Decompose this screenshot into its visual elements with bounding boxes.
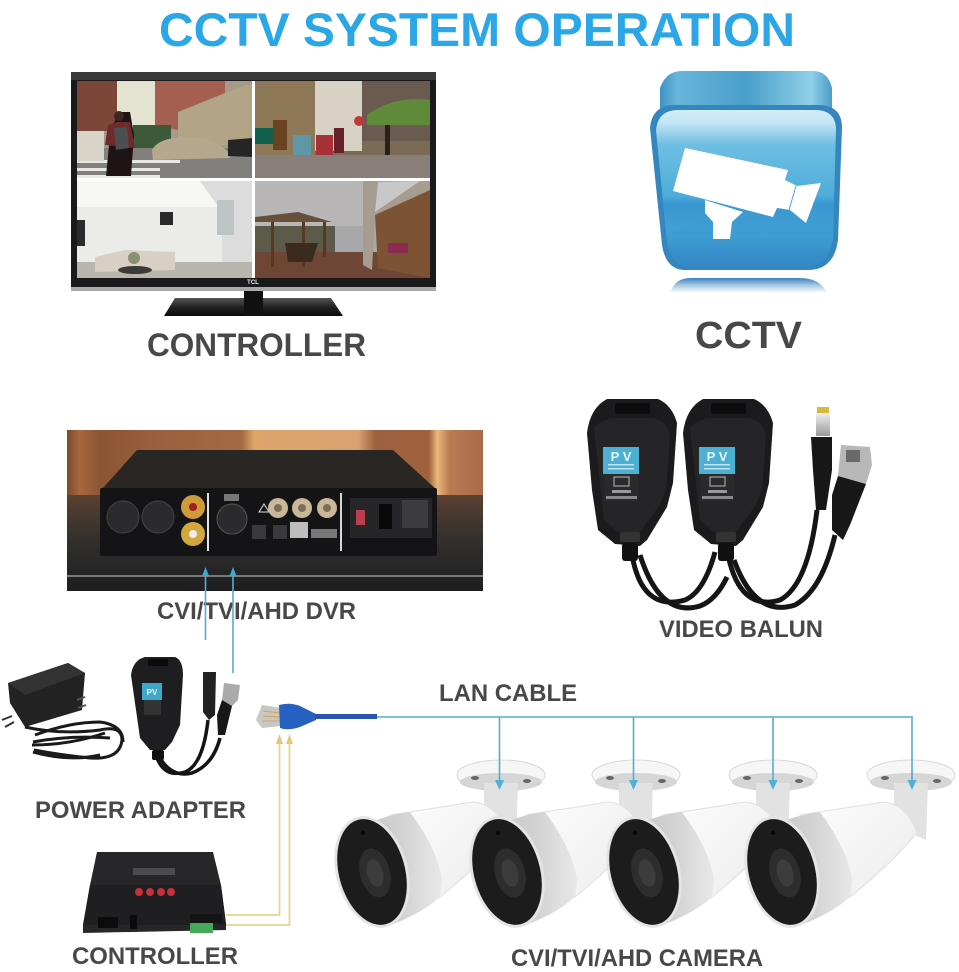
balun left <box>587 399 677 561</box>
camera 2 <box>457 760 680 936</box>
panel: video balun pair <box>587 399 872 608</box>
panel: TV monitor controller <box>71 72 436 316</box>
label: CCTV: CCTV <box>695 315 803 357</box>
icon: single video balun <box>131 657 240 774</box>
arrow: balun to DVR right <box>230 567 236 673</box>
pigtail cables <box>632 510 835 608</box>
icon: power adapter <box>2 663 123 758</box>
camera view: patio <box>255 181 430 278</box>
label: video balun: VIDEO BALUN <box>659 616 823 643</box>
title: CCTV SYSTEM OPERATION <box>159 3 795 56</box>
TV stand <box>164 290 343 316</box>
camera 3 <box>594 760 817 936</box>
icon: CCTV app tile <box>650 71 842 293</box>
arrow: controller to LAN plug left <box>226 734 283 915</box>
panel: DVR photo <box>67 430 483 591</box>
label: controller: CONTROLLER <box>147 327 366 363</box>
icon: controller box <box>83 852 226 933</box>
arrow: controller to LAN plug right <box>226 734 293 925</box>
balun right <box>683 399 773 561</box>
label: camera: CVI/TVI/AHD CAMERA <box>511 945 763 972</box>
icon: single video balun: PV <box>147 688 158 697</box>
cameras group <box>322 760 955 936</box>
label: DVR: CVI/TVI/AHD DVR <box>157 598 356 625</box>
camera 4 <box>732 760 955 936</box>
LAN bus line with drops <box>377 717 916 790</box>
arrow: balun to DVR left <box>202 567 209 640</box>
camera view: old town <box>255 81 430 178</box>
camera view: street <box>77 81 252 178</box>
label: small controller: CONTROLLER <box>72 943 238 970</box>
label: power adapter: POWER ADAPTER <box>35 797 246 824</box>
TV bezel: TCL <box>247 280 259 286</box>
icon: LAN plug <box>256 704 377 729</box>
DC barrel connector <box>811 407 832 510</box>
camera 1 <box>322 760 545 936</box>
label: LAN cable: LAN CABLE <box>439 680 577 707</box>
BNC connector <box>832 445 872 540</box>
camera view: interior <box>77 181 252 278</box>
TV bezel <box>71 72 436 291</box>
